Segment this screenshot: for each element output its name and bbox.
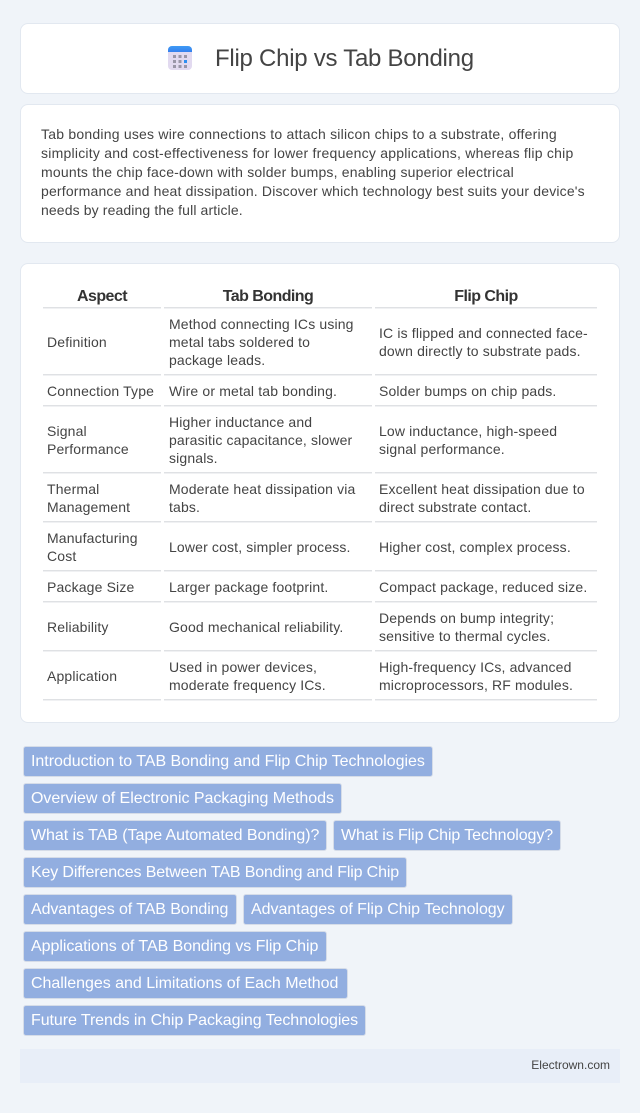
table header: Tab Bonding — [223, 288, 313, 305]
intro text panel — [20, 104, 620, 243]
row: definition: metal tabs soldered to — [169, 334, 310, 350]
row: thermal management — [47, 481, 585, 515]
row: manufacturing cost: Cost — [47, 548, 76, 564]
intro text: performance and heat dissipation. Discover which technology best suits your device's — [41, 183, 585, 199]
tag — [23, 857, 407, 888]
tag — [243, 894, 513, 925]
row: definition: down directly to substrate pads. — [379, 343, 581, 359]
row: connection type: Solder bumps on chip pads. — [379, 383, 556, 399]
tag — [23, 746, 433, 777]
tag: What is TAB (Tape Automated Bonding)? — [31, 827, 319, 844]
row: reliability: sensitive to thermal cycles. — [379, 628, 550, 644]
row: signal performance: Low inductance, high-speed — [379, 423, 557, 439]
tag: Challenges and Limitations of Each Method — [31, 975, 338, 992]
footer — [20, 1049, 620, 1083]
row: definition — [47, 316, 588, 368]
row: signal performance: parasitic capacitance, slower — [169, 432, 352, 448]
comparison table panel — [20, 263, 620, 723]
tag — [23, 968, 348, 999]
row: thermal management: Excellent heat dissipation due to — [379, 481, 585, 497]
tag: Applications of TAB Bonding vs Flip Chip — [31, 938, 318, 955]
row: manufacturing cost — [47, 530, 571, 564]
row: thermal management: tabs. — [169, 499, 200, 515]
row: reliability: Depends on bump integrity; — [379, 610, 554, 626]
row: application: Used in power devices, — [169, 659, 317, 675]
tag — [23, 820, 327, 851]
intro text: needs by reading the full article. — [41, 202, 243, 218]
header card — [20, 23, 620, 94]
tag: What is Flip Chip Technology? — [341, 827, 553, 844]
row: package size: Package Size — [47, 579, 134, 595]
tag — [23, 783, 342, 814]
row: manufacturing cost: Manufacturing — [47, 530, 138, 546]
tag — [23, 931, 327, 962]
row: connection type — [47, 383, 556, 399]
row: manufacturing cost: Lower cost, simpler process. — [169, 539, 351, 555]
row: signal performance — [47, 414, 557, 466]
row: reliability: Good mechanical reliability. — [169, 619, 343, 635]
row: thermal management: Thermal — [47, 481, 99, 497]
row: connection type: Wire or metal tab bonding. — [169, 383, 337, 399]
row: signal performance: Higher inductance and — [169, 414, 312, 430]
intro text: Tab bonding uses wire connections to attach silicon chips to a substrate, offering — [41, 126, 557, 142]
tag — [23, 894, 237, 925]
row: application: moderate frequency ICs. — [169, 677, 326, 693]
icon: calendar chip — [168, 46, 192, 70]
row: thermal management: Management — [47, 499, 130, 515]
tag: Key Differences Between TAB Bonding and Flip Chip — [31, 864, 399, 881]
table of contents tags — [23, 746, 561, 1036]
row: signal performance: Performance — [47, 441, 129, 457]
row: definition: package leads. — [169, 352, 265, 368]
row: reliability — [47, 610, 554, 644]
row: package size — [47, 579, 587, 595]
row: application: microprocessors, RF modules. — [379, 677, 573, 693]
tag — [333, 820, 561, 851]
row: definition: Definition — [47, 334, 107, 350]
table header — [77, 288, 518, 305]
row: definition: IC is flipped and connected face- — [379, 325, 588, 341]
footer credit: Electrown.com — [531, 1058, 610, 1072]
row: thermal management: direct substrate contact. — [379, 499, 531, 515]
row: signal performance: signal performance. — [379, 441, 505, 457]
row: manufacturing cost: Higher cost, complex process. — [379, 539, 571, 555]
intro text: mounts the chip face-down with solder bumps, enabling superior electrical — [41, 164, 514, 180]
tag: Future Trends in Chip Packaging Technologies — [31, 1012, 358, 1029]
row: package size: Larger package footprint. — [169, 579, 328, 595]
table header: Aspect — [77, 288, 127, 305]
intro text — [41, 126, 585, 218]
table header: Flip Chip — [454, 288, 518, 305]
title: Flip Chip vs Tab Bonding — [215, 45, 474, 72]
row: definition: Method connecting ICs using — [169, 316, 354, 332]
tag: Overview of Electronic Packaging Methods — [31, 790, 334, 807]
row: package size: Compact package, reduced size. — [379, 579, 587, 595]
row: application: Application — [47, 668, 117, 684]
tag: Introduction to TAB Bonding and Flip Chip Technologies — [31, 753, 425, 770]
row: signal performance: signals. — [169, 450, 218, 466]
intro text: simplicity and cost-effectiveness for lower frequency applications, whereas flip chip — [41, 145, 574, 161]
row: connection type: Connection Type — [47, 383, 154, 399]
row: application: High-frequency ICs, advanced — [379, 659, 572, 675]
row: reliability: Reliability — [47, 619, 109, 635]
tag: Advantages of TAB Bonding — [31, 901, 228, 918]
row: application — [47, 659, 573, 693]
row: signal performance: Signal — [47, 423, 87, 439]
tag: Advantages of Flip Chip Technology — [251, 901, 505, 918]
tag — [23, 1005, 366, 1036]
row: thermal management: Moderate heat dissipation via — [169, 481, 355, 497]
